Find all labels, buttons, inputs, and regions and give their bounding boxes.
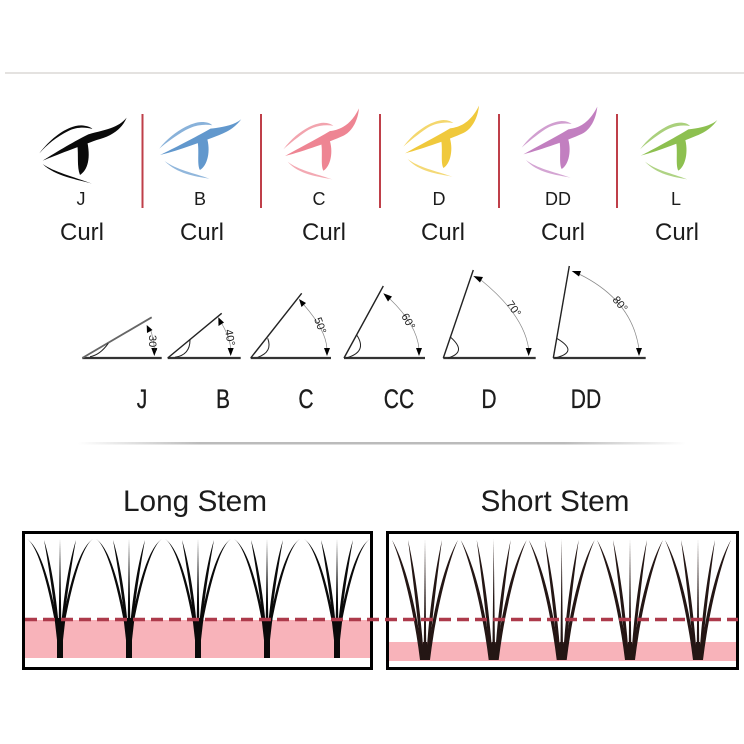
curl word labels: Curl [302,219,346,246]
curl letter labels: B [194,189,206,209]
icon: B curl eye, blue [159,119,241,179]
diagram: CC 60 degrees [344,286,425,358]
angle diagram labels [137,385,601,415]
diagram: J 30 degrees [82,317,162,358]
heading: long stem: Long Stem [123,485,267,518]
curl word labels: Curl [180,219,224,246]
icon: C curl eye, pink [283,108,359,179]
dashed red reference line across both panels [25,618,738,621]
diagram: DD 80 degrees: 80° [610,294,630,315]
diagram: B 40 degrees: 40° [222,328,237,347]
angle diagram labels: DD [571,385,601,415]
curl letter labels [76,189,681,209]
angle diagram labels: D [481,385,497,415]
skin band, long stem [25,620,372,658]
diagram: C 50 degrees: 50° [311,316,328,336]
icon: L curl eye, green [640,120,717,179]
frame, long stem [24,532,372,668]
diagram: DD 80 degrees [553,266,646,358]
diagram: D 70 degrees: 70° [504,299,523,319]
curl letter labels: C [312,189,326,209]
icon: D curl eye, yellow [403,106,479,177]
lash fans, short stem [392,539,731,660]
curl letter labels: J [76,189,86,209]
diagram: CC 60 degrees: 60° [398,312,417,332]
angle diagram labels: B [216,385,230,415]
red separators between curls [142,114,618,208]
curl word labels: Curl [421,219,465,246]
top divider line [5,72,744,74]
panel: short stem lashes [388,532,738,668]
middle divider line [78,442,686,444]
curl word labels: Curl [541,219,585,246]
diagram: B 40 degrees [168,313,241,358]
diagram: D 70 degrees [443,270,536,358]
panel: long stem lashes [24,532,372,668]
icon: DD curl eye, purple [522,107,597,178]
curl word labels: Curl [60,219,104,246]
diagram: J 30 degrees: 30° [146,335,158,352]
skin band, short stem [388,642,737,661]
icon: J curl eye, black [39,118,127,184]
curl word labels [60,219,699,246]
curl letter labels: L [671,189,681,209]
angle diagram labels: CC [384,385,414,415]
curl letter labels: DD [545,189,571,209]
heading: short stem: Short Stem [480,485,630,518]
angle diagram labels: C [298,385,314,415]
curl letter labels: D [432,189,446,209]
panel: curl angle diagrams [82,266,646,415]
lash fans, long stem [27,539,370,658]
angle diagram labels: J [137,385,147,415]
panel: curl eye icons row [39,106,717,246]
diagram: C 50 degrees [251,293,331,358]
frame, short stem [388,532,738,668]
curl word labels: Curl [655,219,699,246]
